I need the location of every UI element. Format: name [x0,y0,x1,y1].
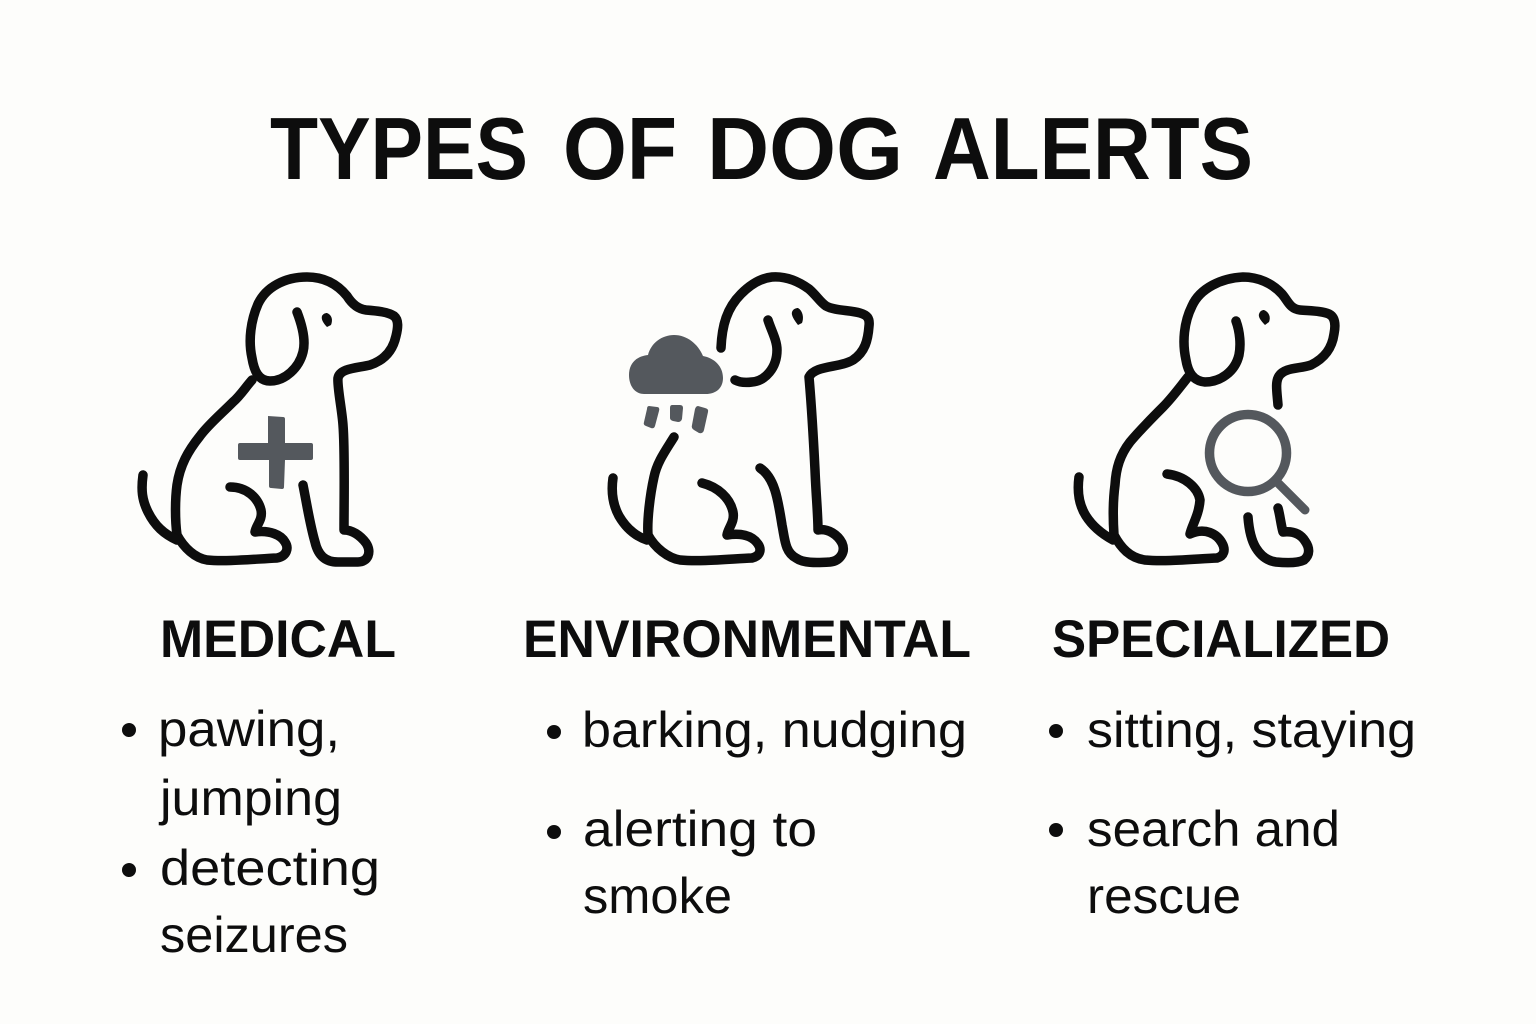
heading: environmental: ENVIRONMENTAL [523,610,971,669]
icon: magnifying glass [1210,414,1305,510]
heading: medical: MEDICAL [160,610,396,669]
list: medical behaviors: detecting [160,840,380,896]
list: specialized behaviors: sitting, staying [1087,702,1416,758]
list: medical behaviors [122,701,380,963]
dog outline [142,277,398,562]
icon: rain cloud [629,335,723,433]
icon: dog with medical cross [142,277,398,562]
list: specialized behaviors [1049,702,1416,924]
panel: specialized [1049,277,1416,924]
icon: dog with magnifying glass [1078,277,1335,563]
title: DOG [707,99,903,198]
list: medical behaviors: pawing, [158,701,340,757]
list: environmental behaviors: barking, nudging [582,702,967,758]
panel: environmental [523,277,971,924]
title: OF [563,99,677,198]
list: specialized behaviors: rescue [1087,868,1241,924]
heading: specialized: SPECIALIZED [1052,610,1390,669]
dog outline [612,277,869,563]
icon: dog with rain cloud [612,277,869,563]
list: environmental behaviors: smoke [583,868,732,924]
panel: medical [122,277,398,963]
title: ALERTS [933,99,1253,198]
list: medical behaviors: seizures [160,907,348,963]
dog outline [1078,277,1335,563]
icon: medical cross [238,416,313,489]
title: TYPES [270,99,528,198]
list: specialized behaviors: search and [1087,801,1340,857]
list: environmental behaviors: alerting to [583,801,817,857]
list: medical behaviors: jumping [158,770,342,826]
list: environmental behaviors [547,702,967,924]
